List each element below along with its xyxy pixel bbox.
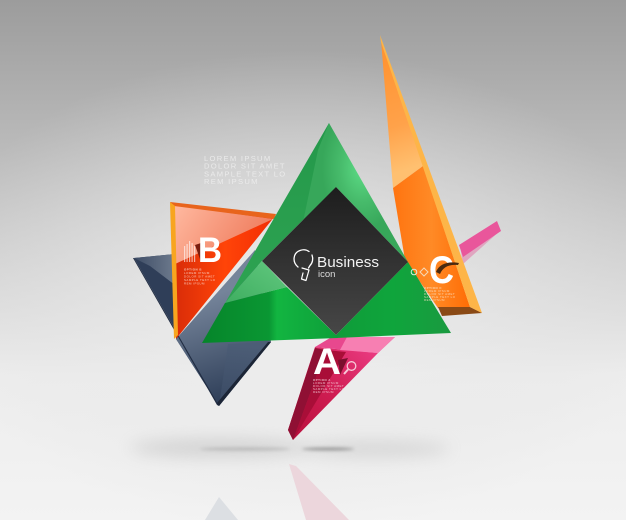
option C label: [411, 249, 459, 302]
pink upper facet: [315, 337, 395, 353]
red orange top rim: [170, 202, 276, 219]
navy lower right facet: [219, 342, 271, 406]
option B small text: LOREM IPSUM: [184, 271, 210, 275]
panel: option B navy triangle: [133, 250, 271, 406]
pink stick behind orange: [459, 221, 501, 264]
letter A: A: [313, 341, 341, 382]
option B label: [184, 231, 222, 286]
sample text: lorem ipsum: LOREM IPSUM: [204, 154, 271, 163]
letter B: B: [198, 231, 222, 270]
option A small text: LOREM IPSUM: [313, 381, 339, 385]
green lower left facet: [202, 287, 338, 343]
floor shadow: [130, 439, 450, 457]
panel: central green triangle: [202, 123, 451, 343]
heading: Business icon: icon: [318, 269, 335, 280]
red gold left rim: [170, 202, 178, 339]
option A small text: DOLOR SIT AMET: [313, 384, 344, 388]
sample text: lorem ipsum: REM IPSUM: [204, 177, 259, 186]
option A label: [313, 341, 356, 394]
navy top facet: [134, 254, 219, 406]
orange upper glass face: [381, 40, 423, 188]
heading: Business icon: [317, 254, 379, 280]
option C small text: LOREM IPSUM: [424, 289, 450, 293]
option C small text: SAMPLE TEXT LO: [424, 295, 456, 299]
icon: circle and diamond: [411, 268, 428, 276]
orange bottom edge: [438, 307, 482, 316]
orange gold rim: [380, 35, 482, 313]
option B small text: DOLOR SIT AMET: [184, 274, 215, 278]
red main face: [175, 207, 275, 339]
green highlight facet: [302, 123, 408, 262]
option B small text: [184, 268, 216, 286]
option C small text: REM IPSUM: [424, 298, 445, 302]
heading: Business icon: Business: [317, 254, 379, 271]
option A small text: REM IPSUM: [313, 390, 334, 394]
green left upper facet: [202, 123, 336, 343]
option A small text: SAMPLE TEXT LO: [313, 387, 345, 391]
icon: bars: [184, 241, 195, 262]
black diamond: [262, 187, 408, 335]
icon: magnifier: [344, 362, 356, 374]
option C small text: [424, 286, 456, 302]
icon: light bulb key: [294, 250, 313, 280]
option C small text: DOLOR SIT AMET: [424, 292, 455, 296]
option A small text: OPTION A: [313, 378, 331, 382]
option B small text: REM IPSUM: [184, 282, 205, 286]
reflection: navy triangle: [205, 497, 238, 520]
option A small text: [313, 378, 345, 394]
sample text: lorem ipsum: SAMPLE TEXT LO: [204, 169, 286, 178]
green lower left light facet: [225, 261, 287, 303]
navy centre facet: [176, 250, 271, 406]
navy dark edge: [133, 258, 219, 406]
option B small text: OPTION B: [184, 268, 202, 272]
panel: option B red triangle: [170, 202, 276, 339]
letter C: C: [429, 249, 454, 292]
crimson main face: [288, 347, 378, 440]
sample text: lorem ipsum: DOLOR SIT AMET: [204, 162, 286, 171]
green lower right facet: [336, 262, 451, 338]
red glass highlight: [174, 205, 273, 264]
panel: option A crimson triangle: [288, 337, 395, 440]
panel: option C orange triangle: [380, 35, 482, 316]
orange lower face: [393, 166, 470, 308]
sample text: lorem ipsum: [204, 154, 286, 186]
reflection: crimson triangle: [289, 464, 349, 520]
crimson dark left facet: [288, 348, 326, 440]
option B small text: SAMPLE TEXT LO: [184, 278, 216, 282]
option C small text: OPTION C: [424, 286, 442, 290]
